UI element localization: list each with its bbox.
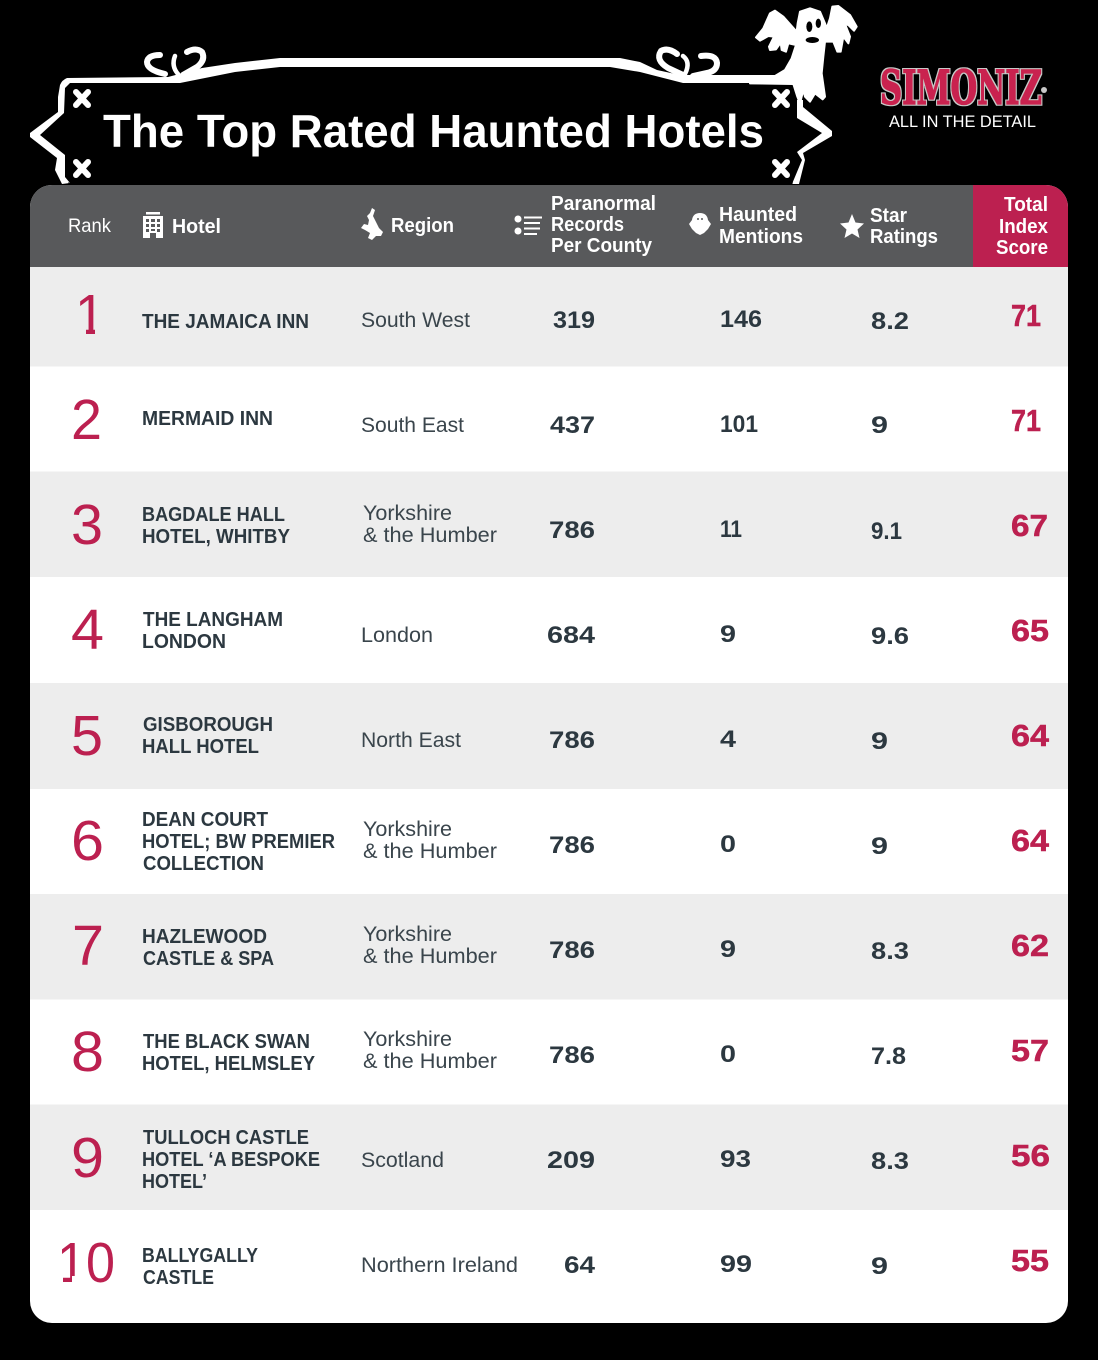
header: star ratings <box>870 205 938 248</box>
icon: small ghost <box>689 213 711 235</box>
row 1: THE JAMAICA INN <box>142 310 309 333</box>
table header <box>68 193 1048 259</box>
icon: building <box>143 212 163 238</box>
row 6: 6 <box>71 809 104 873</box>
row 2: 101 <box>720 411 758 438</box>
row 1 <box>80 295 1040 334</box>
icon: star <box>840 214 864 238</box>
row 4: 65 <box>1011 613 1049 648</box>
row 3 <box>71 493 1048 557</box>
title banner frame <box>30 50 832 184</box>
row 3: BAGDALE HALL <box>142 503 285 526</box>
row 10: 64 <box>564 1252 596 1279</box>
row 7: 9 <box>720 936 736 963</box>
row 3: & the Humber <box>363 523 497 547</box>
row 3: Yorkshire <box>363 501 452 525</box>
icon: list <box>514 216 542 235</box>
row 4: 9 <box>720 621 736 648</box>
row 8 <box>71 1020 1049 1084</box>
row 6: & the Humber <box>363 839 497 863</box>
row 5: 9 <box>871 728 888 755</box>
header: paranormal records: Per County <box>551 235 653 257</box>
row 5: GISBOROUGH <box>143 713 273 736</box>
row 6: HOTEL; BW PREMIER <box>142 830 335 853</box>
icon: UK map <box>361 208 383 240</box>
row 2 <box>71 388 1041 452</box>
row 10: CASTLE <box>143 1266 214 1289</box>
row 5: 64 <box>1011 718 1050 753</box>
row 7: CASTLE & SPA <box>143 947 274 970</box>
row 6: 0 <box>720 831 736 858</box>
header: total index score: Total <box>1004 194 1048 216</box>
header: paranormal records: Paranormal <box>551 193 656 215</box>
row 7: 62 <box>1011 928 1049 963</box>
row 10: 55 <box>1011 1243 1049 1278</box>
table background <box>30 185 1068 1323</box>
row 1: 146 <box>720 306 762 333</box>
header: star ratings: Star <box>870 205 907 227</box>
row 4: 4 <box>71 598 104 662</box>
row 4: 9.6 <box>871 623 909 650</box>
row 8: Yorkshire <box>363 1027 452 1051</box>
row 3: 3 <box>71 493 103 557</box>
header: paranormal records <box>551 193 656 257</box>
row 9: HOTEL’ <box>142 1170 207 1193</box>
row 4 <box>71 598 1049 662</box>
row 8: 57 <box>1011 1033 1049 1068</box>
row 9 <box>71 1126 1050 1193</box>
icon: ghost on banner <box>750 6 857 103</box>
header: total index score: Score <box>996 237 1048 259</box>
row 7: 786 <box>549 937 595 964</box>
row 9: 9 <box>71 1126 104 1190</box>
row 6: DEAN COURT <box>142 808 268 831</box>
row 3: HOTEL, WHITBY <box>142 525 290 548</box>
row 9: 8.3 <box>871 1148 909 1175</box>
row 5: 786 <box>549 727 595 754</box>
row 1: 71 <box>1011 298 1041 333</box>
row 7: 7 <box>72 914 104 978</box>
row 10: BALLYGALLY <box>142 1244 258 1267</box>
row 6: 786 <box>549 832 595 859</box>
row 6 <box>71 808 1050 875</box>
row 4: THE LANGHAM <box>143 608 283 631</box>
header: hotel: Hotel <box>172 216 221 238</box>
row 6: Yorkshire <box>363 817 452 841</box>
row 4: LONDON <box>142 630 226 653</box>
row 10: Northern Ireland <box>361 1253 518 1277</box>
row 1: 8.2 <box>871 308 909 335</box>
row 7 <box>72 914 1049 978</box>
header: region: Region <box>391 215 454 237</box>
header: total index score: Index <box>999 216 1048 238</box>
row 9: Scotland <box>361 1148 444 1172</box>
header: haunted mentions <box>719 204 803 248</box>
row 9: HOTEL ‘A BESPOKE <box>142 1148 320 1171</box>
row 10 <box>62 1242 1048 1284</box>
row 6: COLLECTION <box>143 852 264 875</box>
row 9: 56 <box>1011 1138 1050 1173</box>
row 4: 684 <box>547 622 596 649</box>
row 1: South West <box>361 308 470 332</box>
row 9: 93 <box>720 1146 751 1173</box>
row 8: THE BLACK SWAN <box>143 1030 310 1053</box>
row 7: HAZLEWOOD <box>142 925 267 948</box>
row 10: 99 <box>720 1251 752 1278</box>
corner crosses <box>76 92 787 175</box>
row 5: 4 <box>720 726 737 753</box>
row 8: & the Humber <box>363 1049 497 1073</box>
header: paranormal records: Records <box>551 214 624 236</box>
header: haunted mentions: Haunted <box>719 204 797 226</box>
row 3: 11 <box>720 516 742 543</box>
row 5 <box>71 704 1050 768</box>
row 8: 7.8 <box>871 1043 906 1070</box>
row 8: 0 <box>720 1041 736 1068</box>
row 2: 9 <box>871 412 888 439</box>
row 3: 786 <box>549 517 595 544</box>
row 8: HOTEL, HELMSLEY <box>142 1052 315 1075</box>
row 6: 64 <box>1011 823 1050 858</box>
row 6: 9 <box>871 833 888 860</box>
row 3: 9.1 <box>871 518 902 545</box>
row 4: London <box>361 623 433 647</box>
row 10: 9 <box>871 1253 888 1280</box>
row 7: 8.3 <box>871 938 909 965</box>
row 2: 71 <box>1011 403 1041 438</box>
row 2: 437 <box>550 412 595 439</box>
row 10: 10 <box>57 1231 115 1295</box>
title: The Top Rated Haunted Hotels <box>103 105 764 157</box>
row 8: 786 <box>549 1042 595 1069</box>
row 1: 319 <box>553 307 595 334</box>
header: star ratings: Ratings <box>870 226 938 248</box>
header: rank: Rank <box>68 215 111 237</box>
row 7: & the Humber <box>363 944 497 968</box>
header: haunted mentions: Mentions <box>719 226 803 248</box>
row 2: 2 <box>71 388 102 452</box>
row 8: 8 <box>71 1020 104 1084</box>
header: total index score <box>996 194 1048 259</box>
row 3: 67 <box>1011 508 1048 543</box>
row 9: 209 <box>547 1147 595 1174</box>
logo: Simoniz <box>880 61 1047 131</box>
row 1: 1 <box>75 283 105 347</box>
row 5: 5 <box>71 704 103 768</box>
logo: Simoniz: ALL IN THE DETAIL <box>889 113 1036 131</box>
row 7: Yorkshire <box>363 922 452 946</box>
row 5: HALL HOTEL <box>142 735 259 758</box>
row 2: MERMAID INN <box>142 407 273 430</box>
row 2: South East <box>361 413 464 437</box>
row 5: North East <box>361 728 461 752</box>
row 9: TULLOCH CASTLE <box>143 1126 309 1149</box>
